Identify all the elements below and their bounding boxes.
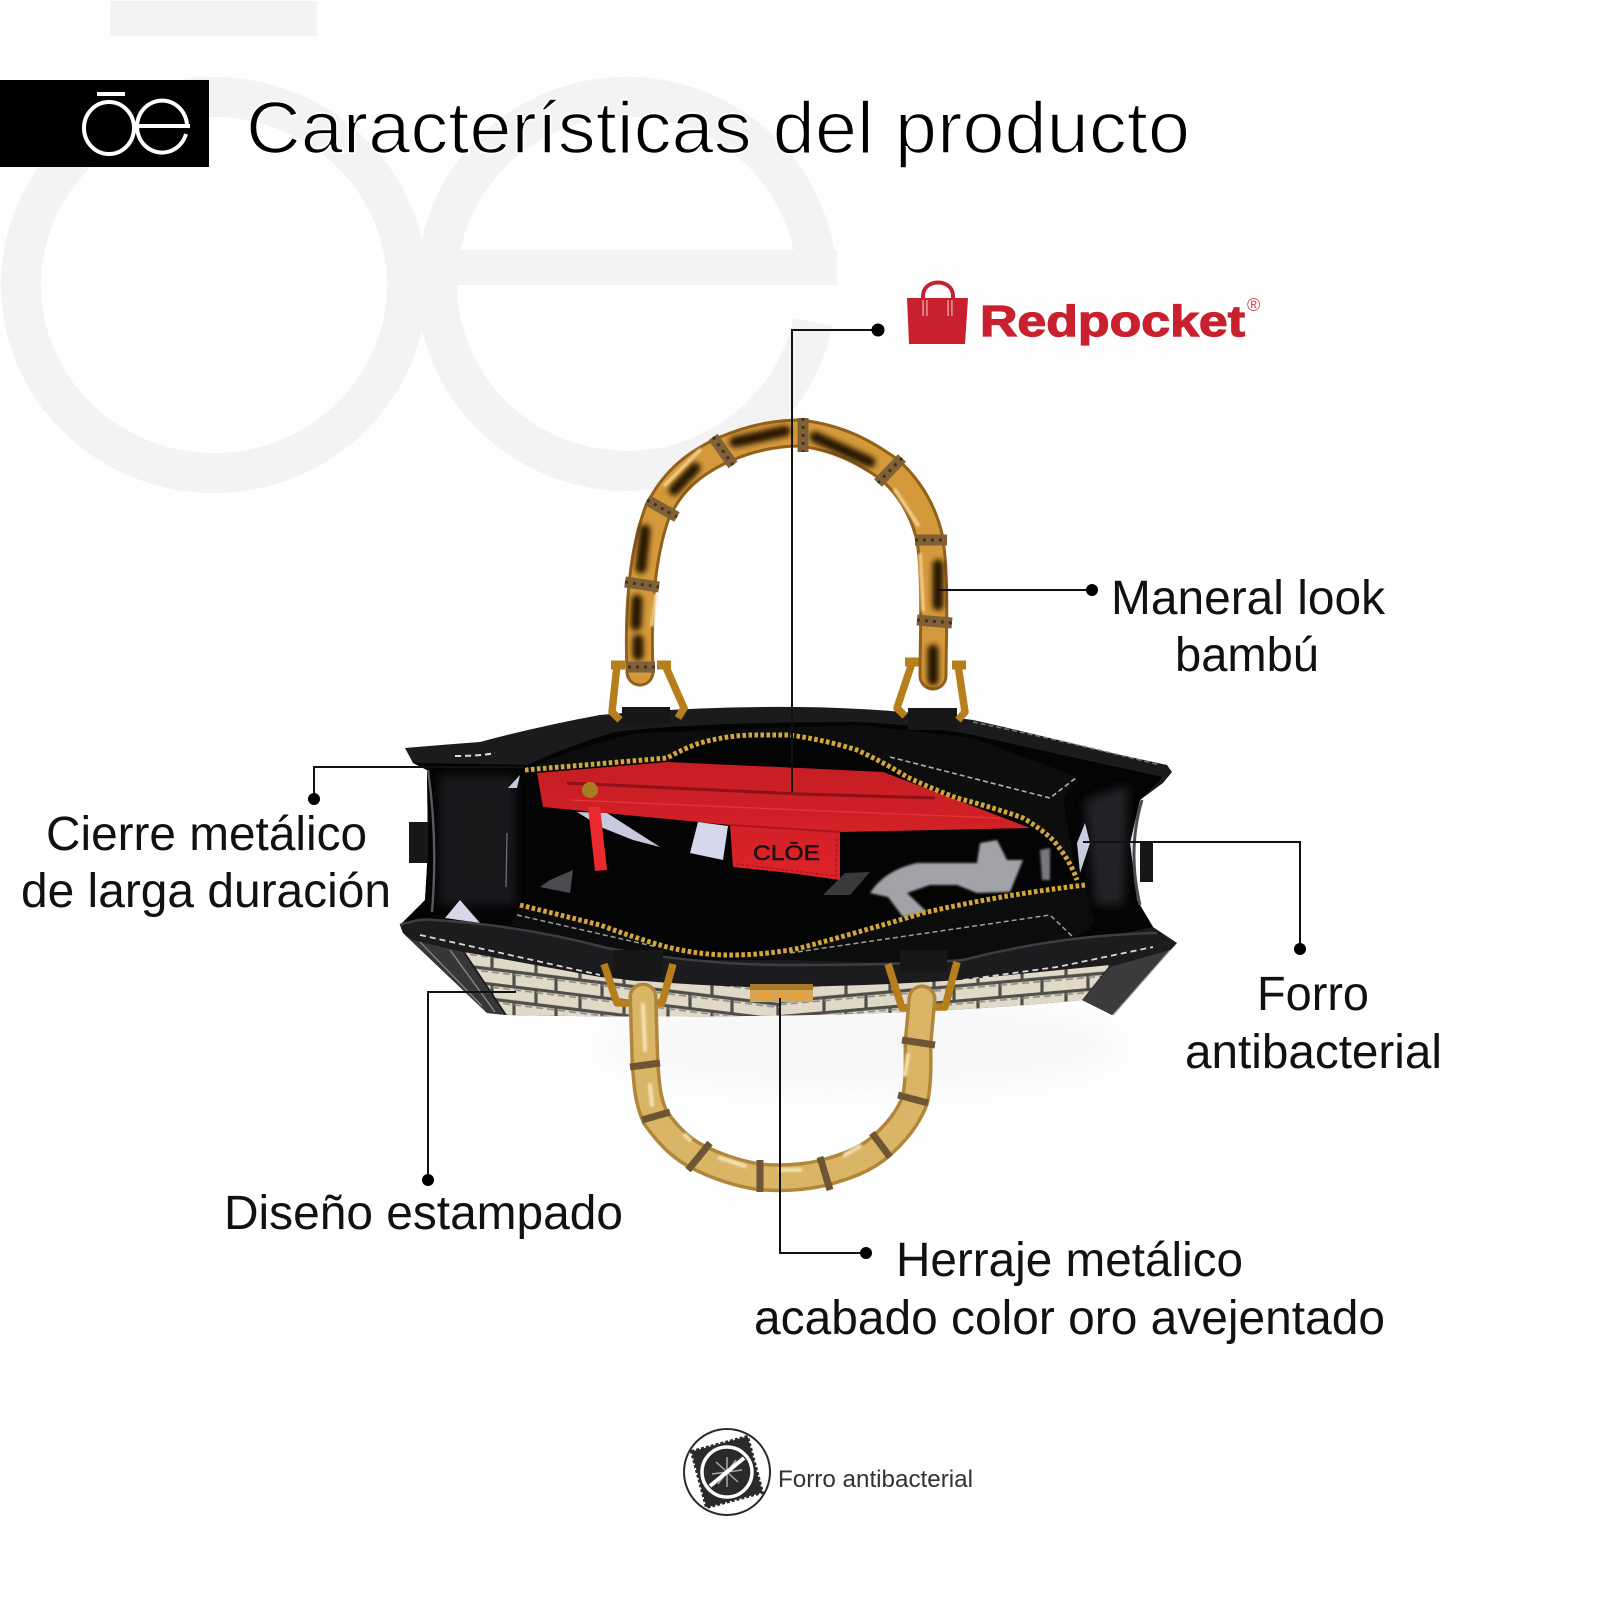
gold hardware [604, 662, 966, 1008]
Redpocket logo [907, 282, 1260, 346]
label: Maneral look bambú [1111, 572, 1386, 682]
label: Forro antibacterial: Forro [1257, 968, 1369, 1021]
callout: print line [422, 992, 516, 1186]
Redpocket logo: Redpocket [980, 297, 1245, 346]
gold zippers [520, 735, 1085, 955]
lower lining flap [510, 885, 1095, 965]
bag interior [400, 722, 1163, 960]
callout: Redpocket line [792, 324, 884, 792]
brand tag text: CLŌE [753, 842, 820, 865]
callout: hardware line [780, 998, 872, 1259]
bag silhouette and rim [400, 707, 1177, 1016]
handbag [400, 418, 1177, 1192]
caption: Forro antibacterial: Forro antibacterial [778, 1466, 973, 1493]
label: Maneral look bambú: bambú [1175, 629, 1319, 682]
interior wall sheen [428, 770, 1142, 912]
printed pattern [465, 952, 1110, 1016]
icon: antibacterial lining [684, 1429, 770, 1515]
top bamboo handle [625, 418, 952, 680]
label: Cierre metálico: Cierre metálico [46, 808, 367, 861]
callout: bamboo handle line [938, 584, 1098, 596]
rim stitching [455, 753, 495, 756]
red pouch [537, 762, 1030, 880]
callout: zipper line [308, 767, 526, 805]
watermark logo [21, 1, 837, 473]
label: Diseño estampado: Diseño estampado [224, 1187, 623, 1240]
leather tabs [409, 707, 1153, 981]
title: Características del producto [246, 88, 1190, 169]
label: Forro antibacterial: antibacterial [1185, 1026, 1442, 1079]
header logo box [0, 80, 209, 167]
zipper pull [588, 807, 607, 871]
label: Cierre metálico [21, 808, 391, 918]
metal clasp [750, 984, 813, 1002]
bottom bamboo handle [630, 997, 935, 1192]
label: Forro antibacterial [1185, 968, 1442, 1079]
label: Cierre metálico: de larga duración [21, 865, 391, 918]
callout: lining line [1083, 842, 1306, 955]
Redpocket logo: ® [1247, 295, 1260, 315]
soft shadow under bag [600, 1000, 1120, 1090]
label: Herraje metálico: Herraje metálico [896, 1234, 1243, 1287]
label: Herraje metálico: acabado color oro avejentado [754, 1292, 1385, 1345]
interior reflections [445, 775, 1090, 923]
front side panels [405, 935, 505, 1015]
label: Herraje metálico [754, 1234, 1385, 1345]
front lip and band [400, 920, 1177, 987]
upper lining flap [525, 725, 1077, 880]
label: Maneral look bambú: Maneral look [1111, 572, 1386, 625]
